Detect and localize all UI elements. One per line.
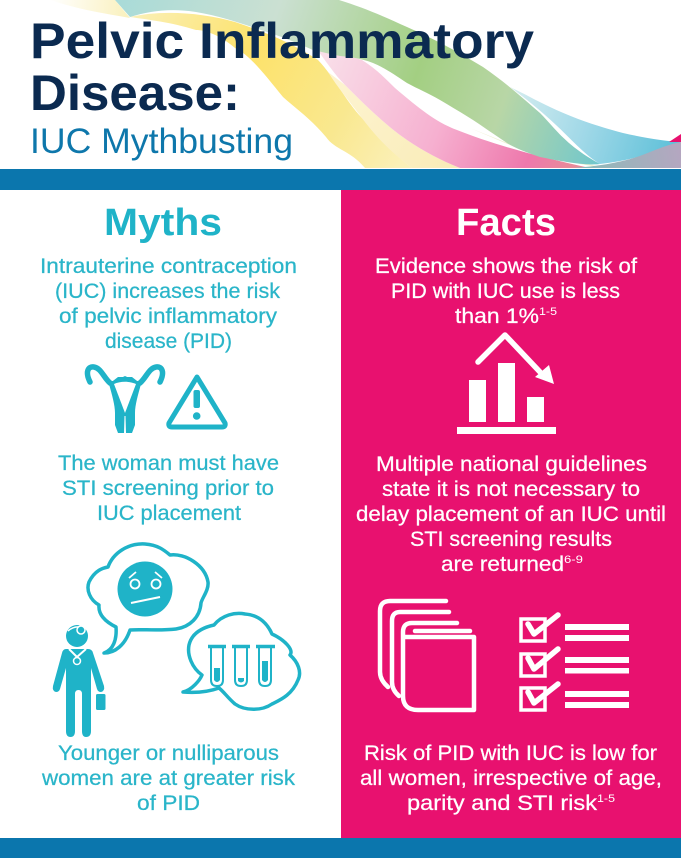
- myth 3 text: Younger or nulliparous: [58, 742, 279, 765]
- myth 2 text: The woman must have: [58, 452, 279, 475]
- icon: checklist: [521, 615, 629, 710]
- fact 3 text: all women, irrespective of age,: [360, 767, 662, 790]
- fact 2 text: delay placement of an IUC until: [356, 503, 666, 526]
- myth 1 text: Intrauterine contraception: [40, 255, 297, 278]
- fact 3 text: Risk of PID with IUC is low for: [364, 742, 657, 765]
- icon: declining bar chart: [457, 335, 556, 434]
- icon: uterus: [87, 367, 163, 433]
- title: Pelvic Inflammatory: [30, 13, 534, 69]
- fact 3 text: 1-5: [597, 793, 615, 805]
- fact 1 text: Evidence shows the risk of: [375, 255, 637, 278]
- icon: speech bubble with worried face: [88, 544, 208, 653]
- myth 1 text: of pelvic inflammatory: [59, 305, 278, 328]
- icon: speech bubble with test tubes: [183, 613, 300, 709]
- icon: warning triangle: [169, 377, 225, 427]
- header ribbon graphic: [50, 0, 681, 168]
- bottom blue band: [0, 838, 681, 858]
- myth 3 text: women are at greater risk: [41, 767, 296, 790]
- myth 2 text: IUC placement: [97, 502, 241, 525]
- fact 2 text: Multiple national guidelines: [376, 453, 647, 476]
- heading: facts: Facts: [456, 202, 556, 244]
- fact 2 text: state it is not necessary to: [382, 478, 640, 501]
- myth 1 text: [40, 255, 297, 353]
- icon: stack of guideline documents: [380, 601, 474, 710]
- fact 2 text: 6-9: [564, 554, 583, 566]
- fact 1 text: than 1%: [455, 305, 539, 328]
- myth 1 text: (IUC) increases the risk: [55, 280, 281, 303]
- fact 1 text: PID with IUC use is less: [391, 280, 620, 303]
- fact 1 text: [375, 255, 637, 328]
- fact 2 text: STI screening results: [410, 528, 612, 551]
- icon: doctor: [53, 625, 106, 737]
- subtitle: IUC Mythbusting: [30, 122, 293, 161]
- top blue band: [0, 169, 681, 190]
- title: Disease:: [30, 65, 240, 121]
- heading: myths: Myths: [104, 202, 222, 244]
- fact 3 text: [360, 742, 662, 815]
- myth 3 text: [41, 742, 296, 815]
- fact 3 text: parity and STI risk: [407, 792, 598, 815]
- myth 2 text: STI screening prior to: [62, 477, 274, 500]
- panel: facts background: [341, 190, 681, 838]
- fact 1 text: 1-5: [539, 306, 557, 318]
- myth 2 text: [58, 452, 279, 525]
- myth 3 text: of PID: [137, 792, 200, 815]
- fact 2 text: [356, 453, 666, 576]
- title: [30, 13, 534, 121]
- myth 1 text: disease (PID): [105, 330, 232, 353]
- fact 2 text: are returned: [441, 553, 564, 576]
